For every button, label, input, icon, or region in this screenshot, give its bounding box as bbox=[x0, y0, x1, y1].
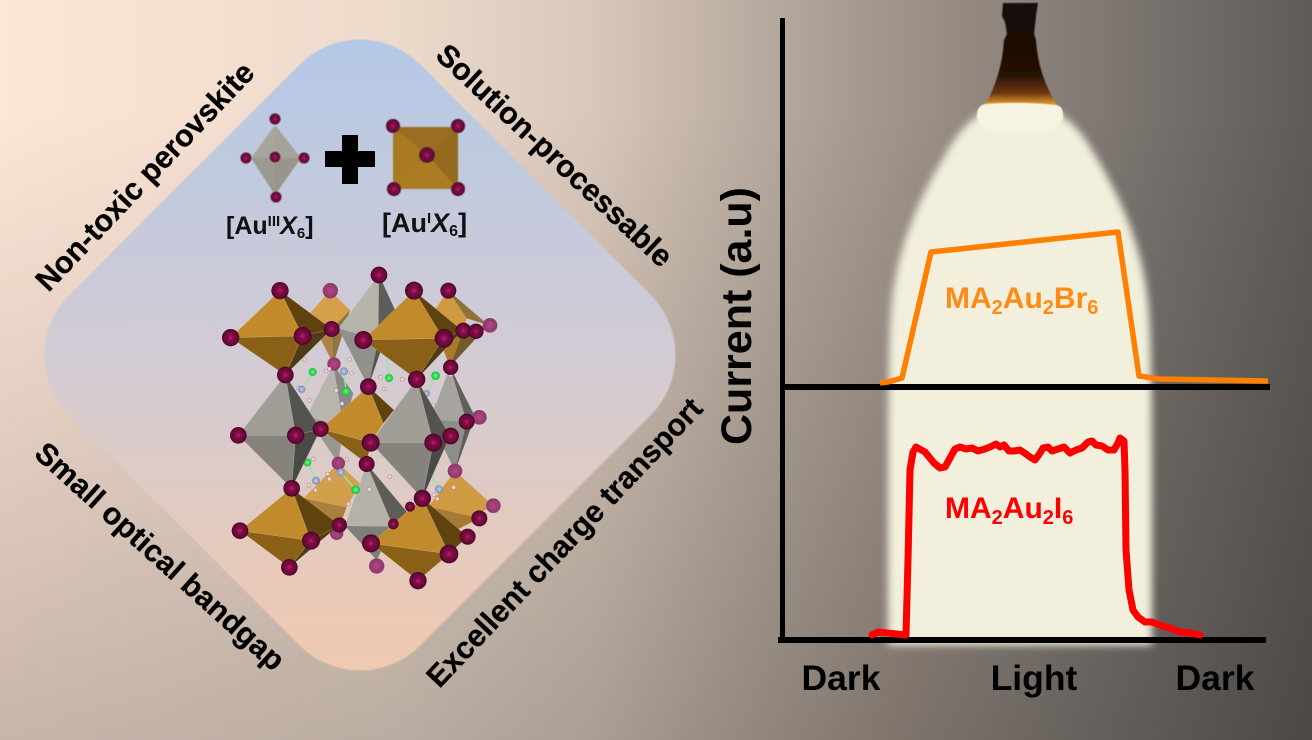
label: Excellent charge transport: Excellent charge transport bbox=[420, 391, 709, 694]
light beam bbox=[888, 105, 1152, 645]
label: MA2Au2Br6: 6 bbox=[1087, 297, 1098, 319]
icon: plus sign bbox=[325, 135, 375, 184]
front gray octahedra bbox=[238, 375, 450, 498]
label: MA2Au2I6: Au bbox=[1003, 492, 1043, 525]
x label: Light: Light bbox=[991, 658, 1078, 698]
faded back atoms bbox=[323, 283, 501, 574]
label: [AuIX6]: 6 bbox=[449, 223, 458, 240]
organic cations bbox=[297, 357, 456, 506]
label: Small optical bandgap: Small optical bandgap bbox=[28, 436, 291, 677]
panel: rounded diamond bbox=[9, 4, 711, 706]
label: [AuIIIX6]: III bbox=[268, 213, 280, 230]
icon: Au(I) octahedron bbox=[386, 119, 465, 196]
axis: upper baseline bbox=[782, 384, 1270, 390]
label: [AuIIIX6]: ] bbox=[305, 212, 314, 240]
label: MA2Au2Br6: Br bbox=[1054, 282, 1088, 315]
label: MA2Au2I6: 6 bbox=[1062, 507, 1073, 529]
label: Non-toxic perovskite: Non-toxic perovskite bbox=[29, 56, 261, 298]
label: MA2Au2Br6: 2 bbox=[1043, 297, 1054, 319]
label: MA2Au2Br6: 2 bbox=[992, 297, 1003, 319]
icon: Au(III) octahedron bbox=[240, 114, 310, 202]
label: [AuIX6]: I bbox=[427, 210, 431, 227]
label: [AuIX6]: ] bbox=[458, 208, 467, 238]
label: [AuIX6]: X bbox=[429, 208, 451, 238]
label: MA2Au2I6: 2 bbox=[992, 507, 1003, 529]
x label: Dark: Dark bbox=[1176, 658, 1255, 698]
label: [AuIIIX6]: X bbox=[278, 212, 298, 240]
front gold octahedra bbox=[231, 291, 468, 581]
chart line: MA2Au2Br6 bbox=[880, 232, 1268, 383]
axis: lower baseline bbox=[778, 637, 1266, 643]
label: MA2Au2I6: MA bbox=[945, 492, 992, 525]
y axis title: Current (a.u) bbox=[713, 187, 761, 445]
label: [AuIX6]: [Au bbox=[382, 208, 427, 238]
back gray octahedra bbox=[307, 275, 475, 560]
label: [AuIIIX6]: 6 bbox=[297, 225, 305, 242]
label: Solution-processable: Solution-processable bbox=[429, 37, 679, 274]
crystal structure bbox=[222, 267, 501, 589]
icon: light bulb bbox=[977, 3, 1063, 133]
x label: Dark: Dark bbox=[802, 658, 881, 698]
label: MA2Au2Br6: Au bbox=[1003, 282, 1043, 315]
back gold octahedra bbox=[303, 291, 493, 537]
label: MA2Au2I6: I bbox=[1054, 492, 1062, 525]
y axis bbox=[780, 18, 785, 642]
label: [AuIIIX6]: [Au bbox=[226, 212, 268, 240]
label: MA2Au2I6: 2 bbox=[1043, 507, 1054, 529]
label: MA2Au2Br6: MA bbox=[945, 282, 992, 315]
iodine atoms bbox=[222, 267, 487, 589]
chart line: MA2Au2I6 bbox=[872, 438, 1200, 635]
